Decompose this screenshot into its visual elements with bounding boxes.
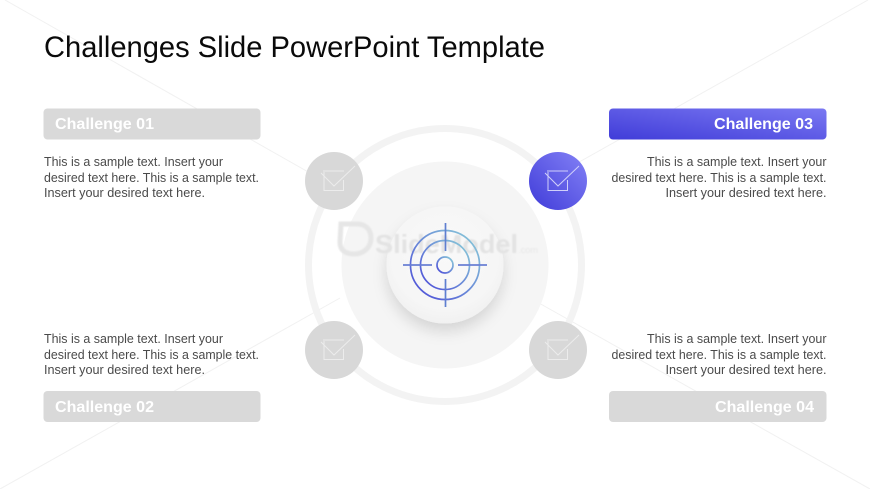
- panel: challenge 03: Challenge 03: [714, 116, 813, 133]
- panel: challenge 04: Insert your desired text here.: [666, 363, 826, 377]
- centre ball: [386, 206, 504, 324]
- central diagram: [305, 128, 587, 402]
- panel: challenge 01: Challenge 01: [55, 116, 154, 133]
- panel: challenge 01: [44, 108, 260, 200]
- icon: target: [403, 223, 487, 307]
- panel: challenge 03: desired text here. This is a sample text.: [612, 171, 826, 185]
- node: challenge 03 icon: [529, 152, 587, 210]
- panel: challenge 02: Insert your desired text here.: [44, 363, 205, 377]
- panel: challenge 01: This is a sample text. Insert your: [44, 155, 223, 169]
- watermark: SlideModel: [375, 229, 518, 259]
- node: challenge 02 icon: [305, 321, 363, 379]
- outer ring: [308, 128, 582, 402]
- node: challenge 04 icon: [529, 321, 587, 379]
- middle disc: [342, 162, 548, 368]
- watermark: [340, 224, 538, 259]
- panel: challenge 02: This is a sample text. Insert your: [44, 332, 223, 346]
- panel: challenge 04: desired text here. This is a sample text.: [612, 348, 826, 362]
- panel: challenge 03: Insert your desired text here.: [666, 186, 826, 200]
- panel: challenge 02: Challenge 02: [55, 399, 154, 416]
- panel: challenge 02: [44, 332, 260, 422]
- panel: challenge 03: [609, 108, 826, 200]
- panel: challenge 04: This is a sample text. Insert your: [647, 332, 826, 346]
- watermark: .com: [518, 245, 538, 255]
- panel: challenge 03: This is a sample text. Insert your: [647, 155, 826, 169]
- panel: challenge 02: desired text here. This is a sample text.: [44, 348, 259, 362]
- panel: challenge 04: Challenge 04: [715, 399, 814, 416]
- node: challenge 01 icon: [305, 152, 363, 210]
- title: Challenges Slide PowerPoint Template: [44, 31, 545, 64]
- panel: challenge 04: [609, 332, 826, 422]
- panel: challenge 01: Insert your desired text here.: [44, 186, 205, 200]
- panel: challenge 01: desired text here. This is a sample text.: [44, 171, 259, 185]
